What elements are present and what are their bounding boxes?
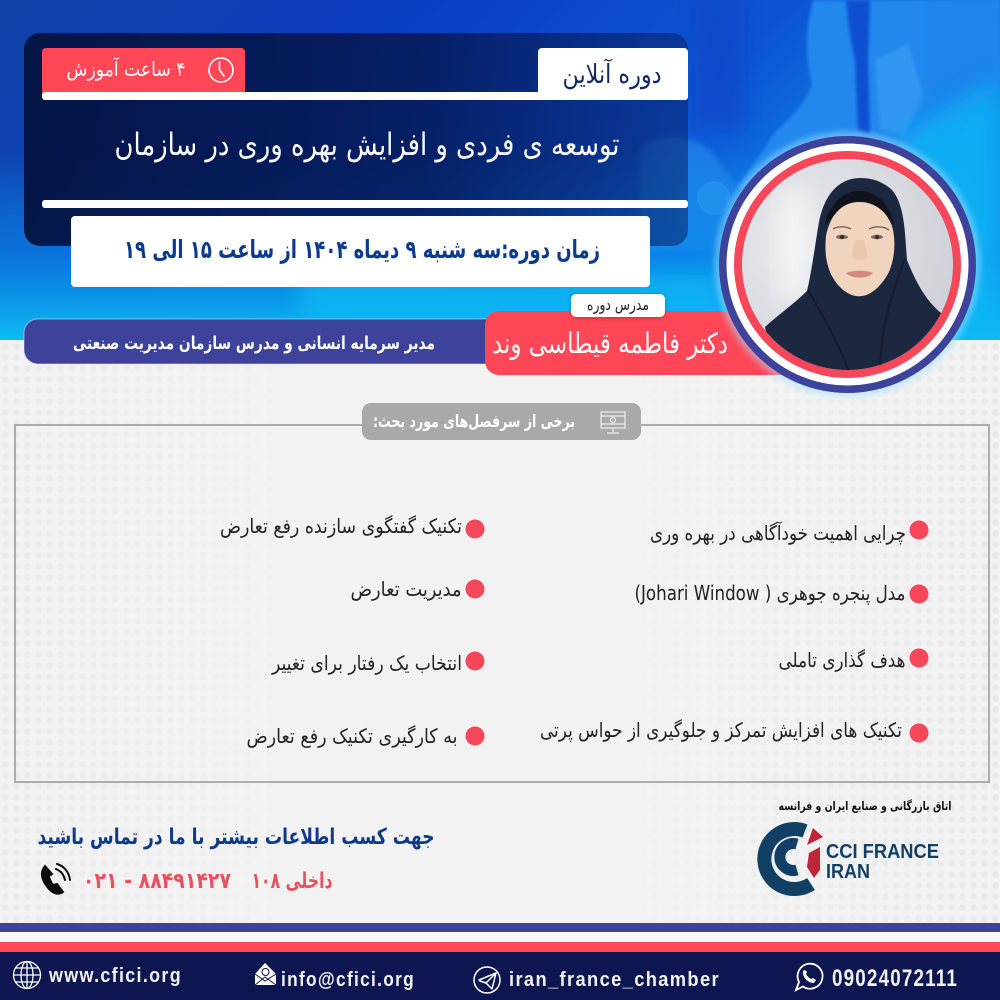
panel: dark course header (24, 33, 688, 246)
red duration tab (42, 48, 245, 94)
logo: CCI France Iran (764, 799, 952, 889)
online course label: دوره آنلاین (562, 58, 662, 90)
topic 1: چرایی اهمیت خودآگاهی در بهره وری (650, 520, 906, 545)
topic 5: تکنیک گفتگوی سازنده رفع تعارض (220, 514, 462, 538)
logo: CCI France Iran: CCI FRANCE (826, 841, 939, 863)
instructor portrait (714, 132, 980, 398)
phone number: داخلی ۱۰۸ (252, 869, 332, 894)
topic 8: به کارگیری تکنیک رفع تعارض (246, 724, 458, 748)
instructor label (571, 294, 665, 317)
icon: phone (42, 864, 70, 894)
contact call to action: جهت کسب اطلاعات بیشتر با ما در تماس باشید (38, 825, 434, 850)
panel: course date (71, 216, 650, 287)
panel: instructor position: مدیر سرمایه انسانی و مدرس سازمان مدیریت صنعتی (73, 333, 435, 354)
lips (846, 271, 873, 278)
panel: instructor name: دکتر فاطمه قیطاسی وند (492, 327, 728, 360)
dotted background pattern (0, 340, 1000, 930)
panel: instructor name (485, 311, 790, 375)
icon: clock (209, 58, 233, 82)
email: info@cfici.org (281, 969, 415, 991)
topics: left column (220, 514, 484, 748)
white top rule (42, 92, 688, 100)
whatsapp (796, 964, 958, 992)
telegram: iran_france_chamber (509, 969, 720, 991)
website (14, 962, 182, 988)
footer contact bar (0, 952, 1000, 1000)
hijab (765, 178, 945, 375)
outer C (764, 829, 811, 889)
icon: monitor (601, 412, 625, 433)
topics heading pill (362, 403, 641, 440)
whatsapp: 09024072111 (832, 965, 958, 992)
instructor label: مدرس دوره (587, 295, 649, 315)
white bottom rule (42, 200, 688, 208)
phone number (83, 869, 332, 894)
topic 2: مدل پنجره جوهری ( Johari Window) (634, 581, 906, 606)
topics: right column (540, 520, 928, 743)
topic 7: انتخاب یک رفتار برای تغییر (271, 651, 462, 675)
topic 6: مدیریت تعارض (350, 577, 462, 601)
panel: topics box (15, 403, 989, 782)
website: www.cfici.org (48, 965, 182, 987)
logo: CCI France Iran: IRAN (826, 861, 870, 883)
hair (825, 191, 894, 226)
icon: telegram (474, 967, 500, 993)
email (255, 963, 415, 991)
icon: whatsapp (796, 964, 823, 990)
icon: envelope (255, 963, 276, 985)
panel: course date: زمان دوره:سه شنبه ۹ دیماه ۱۴۰۴ از ساعت ۱۵ الی ۱۹ (124, 235, 600, 265)
brows and eyes (833, 227, 889, 230)
course title: توسعه ی فردی و افزایش بهره وری در سازمان (114, 127, 620, 163)
red duration tab: ۴ ساعت آموزش (66, 56, 186, 81)
topics heading pill: برخی از سرفصل‌های مورد بحث: (373, 412, 575, 432)
topic 3: هدف گذاری تاملی (778, 648, 906, 672)
phone number: ۰۲۱ - ۸۸۴۹۱۴۲۷ (83, 869, 231, 894)
online course label (538, 48, 688, 100)
logo: CCI France Iran: اتاق بازرگانی و صنایع ایران و فرانسه (778, 799, 952, 814)
red wedges (807, 828, 823, 845)
icon: globe (14, 962, 40, 988)
footer tricolour bands (0, 923, 1000, 952)
header photo background (0, 0, 1000, 345)
panel: instructor position (24, 319, 504, 364)
telegram (474, 967, 720, 993)
inner C (780, 843, 797, 870)
face (825, 202, 894, 296)
topic 4: تکنیک های افزایش تمرکز و جلوگیری از حواس پرتی (540, 718, 902, 743)
